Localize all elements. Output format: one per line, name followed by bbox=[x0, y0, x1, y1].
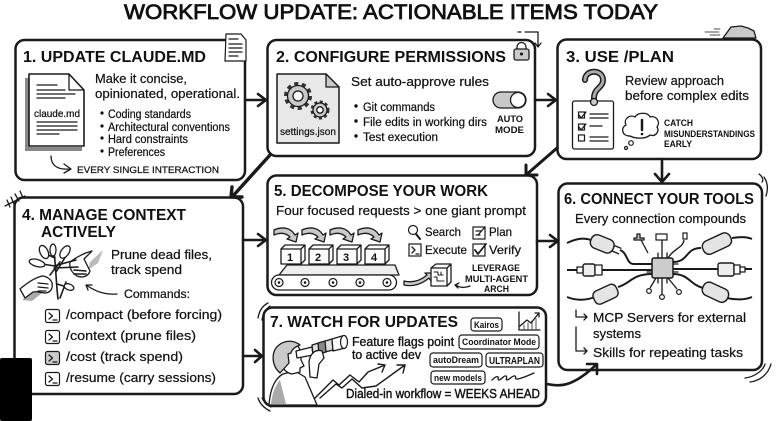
text: concise statement: opinionated, operational. bbox=[95, 86, 240, 101]
tag: ultraplan: ULTRAPLAN bbox=[489, 355, 540, 367]
label: leverage multi-agent arch bbox=[465, 263, 528, 295]
text: review approach: before complex edits bbox=[625, 88, 750, 103]
label: commands with arrow bbox=[86, 285, 190, 301]
label: leverage multi-agent arch: MULTI-AGENT bbox=[465, 274, 528, 285]
panel 7: watch for updates bbox=[258, 303, 546, 411]
icon: conveyor with four boxes: 1 bbox=[287, 252, 293, 264]
icon: lock bbox=[514, 42, 529, 60]
arrow: step 1 to step 2 bbox=[245, 94, 266, 106]
plug: lower right bbox=[700, 280, 731, 304]
tag: new models: new models bbox=[434, 373, 482, 384]
arrows: zigzag trend bbox=[315, 364, 405, 398]
icon: thought cloud bbox=[623, 113, 658, 150]
text: concise statement: Make it concise, bbox=[95, 71, 187, 86]
icon: claude.md document bbox=[25, 74, 84, 151]
heading 2: 2. CONFIGURE PERMISSIONS bbox=[276, 49, 506, 66]
heading 1: 1. UPDATE CLAUDE.MD bbox=[23, 49, 206, 66]
text: feature flags: Feature flags point bbox=[352, 335, 455, 349]
arrow: step 2 to step 4 bbox=[231, 155, 270, 197]
list: auto-approve items bbox=[354, 102, 487, 144]
icon: conveyor with four boxes: 2 bbox=[315, 252, 321, 264]
list: auto-approve items: Git commands bbox=[363, 102, 435, 114]
items: search plan execute verify bbox=[408, 225, 521, 257]
plug: upper left bbox=[588, 233, 622, 257]
plug: lower left bbox=[591, 283, 620, 306]
icon: small gear bbox=[312, 102, 328, 118]
decoration: dashed corner arrow bbox=[518, 32, 541, 47]
decoration: rock on panel bbox=[723, 26, 756, 38]
arrow: step 7 to step 6 bbox=[547, 364, 597, 385]
heading 7: 7. WATCH FOR UPDATES bbox=[270, 314, 458, 331]
text: every connection compounds: Every connection compounds bbox=[575, 211, 746, 226]
text: prune dead files: Prune dead files, bbox=[111, 247, 212, 262]
items: search plan execute verify: Verify bbox=[489, 243, 521, 257]
decoration: squiggle bbox=[492, 373, 534, 380]
command: cost: /cost (track spend) bbox=[66, 349, 183, 364]
panel 3: use /plan bbox=[558, 26, 761, 159]
command: resume: /resume (carry sessions) bbox=[66, 370, 216, 385]
label: commands with arrow: Commands: bbox=[124, 287, 190, 301]
plug: middle right bbox=[718, 263, 745, 276]
command: compact: /compact (before forcing) bbox=[66, 307, 222, 322]
icon: checklist clipboard bbox=[572, 98, 614, 149]
heading 6: 6. CONNECT YOUR TOOLS bbox=[564, 191, 754, 208]
arrow: step 4 to step 7 bbox=[243, 350, 262, 362]
icon: conveyor with four boxes: 4 bbox=[371, 252, 378, 264]
list: tools: MCP Servers for external bbox=[593, 310, 746, 325]
items: search plan execute verify: Execute bbox=[425, 243, 467, 257]
plug: middle left bbox=[577, 264, 602, 276]
panel 6: connect your tools bbox=[558, 174, 771, 382]
callout: catch misunderstandings early bbox=[664, 118, 755, 150]
command: context: /context (prune files) bbox=[66, 328, 196, 343]
icon: conveyor with four boxes: 3 bbox=[343, 252, 349, 264]
callout: catch misunderstandings early: MISUNDERSTANDINGS bbox=[664, 129, 755, 140]
items: search plan execute verify: Plan bbox=[489, 225, 512, 239]
text: review approach bbox=[625, 73, 750, 103]
decoration: hatch marks bbox=[5, 191, 25, 207]
list: tools bbox=[576, 310, 746, 360]
text: four focused requests: Four focused requests > one giant prompt bbox=[276, 203, 526, 218]
black corner block bbox=[0, 358, 32, 421]
decoration: motion lines bbox=[258, 303, 271, 411]
icon: claude.md document: claude.md bbox=[34, 109, 80, 120]
decoration: speed lines bbox=[705, 29, 720, 35]
icon: conveyor with four boxes bbox=[272, 228, 399, 290]
list: tools: Skills for repeating tasks bbox=[593, 345, 744, 360]
list: claude.md contents: Hard constraints bbox=[108, 134, 188, 146]
toggle: auto mode: AUTO bbox=[497, 114, 523, 124]
text: auto-approve rules: Set auto-approve rules bbox=[351, 74, 490, 89]
callout: every single interaction bbox=[51, 156, 219, 176]
panel 1: update claude.md bbox=[16, 34, 246, 180]
tag: autodream: autoDream bbox=[433, 355, 479, 366]
label: leverage multi-agent arch: LEVERAGE bbox=[472, 263, 520, 274]
text: prune dead files: track spend bbox=[111, 262, 182, 277]
heading 4: 4. MANAGE CONTEXT bbox=[22, 207, 186, 224]
icon: question mark bbox=[585, 72, 603, 106]
text: dialed-in workflow: Dialed-in workflow = WEEKS AHEAD bbox=[346, 386, 540, 401]
text: feature flags: to active dev bbox=[352, 348, 422, 362]
icon: multi-agent cube with arrows bbox=[404, 264, 470, 288]
text: review approach: Review approach bbox=[625, 73, 724, 88]
heading 4 bbox=[22, 207, 186, 241]
title: WORKFLOW UPDATE: ACTIONABLE ITEMS TODAY bbox=[124, 1, 658, 24]
heading 5: 5. DECOMPOSE YOUR WORK bbox=[274, 183, 488, 200]
tag: kairos: Kairos bbox=[474, 320, 499, 331]
arrow: step 2 to step 3 bbox=[535, 94, 556, 106]
panel 2: configure permissions bbox=[268, 32, 541, 156]
list: commands bbox=[46, 307, 222, 386]
callout: catch misunderstandings early: EARLY bbox=[664, 139, 693, 150]
list: tools: systems bbox=[593, 326, 642, 341]
arrow: step 3 to step 5 bbox=[526, 148, 557, 175]
text: concise statement bbox=[95, 71, 240, 101]
text: feature flags bbox=[352, 335, 455, 362]
plug: upper right bbox=[700, 231, 733, 256]
icon: small document bbox=[225, 34, 246, 61]
icon: person with telescope bbox=[269, 336, 348, 405]
panel 5: decompose your work bbox=[268, 176, 537, 295]
list: claude.md contents: Architectural conventions bbox=[108, 122, 230, 134]
list: auto-approve items: Test execution bbox=[363, 132, 438, 144]
arrow: step 5 to step 6 bbox=[537, 235, 558, 247]
icon: settings.json file bbox=[277, 74, 339, 143]
tag: coordinator mode: Coordinator Mode bbox=[462, 337, 536, 348]
diagram: chip with cables and plugs bbox=[567, 231, 752, 306]
callout: catch misunderstandings early: CATCH bbox=[664, 118, 693, 129]
panel 4: manage context actively bbox=[5, 191, 243, 394]
arrow: step 4 to step 5 bbox=[243, 234, 266, 246]
icon: hands pruning plant bbox=[20, 244, 103, 301]
icon: large gear bbox=[286, 84, 310, 108]
heading 4: ACTIVELY bbox=[41, 224, 116, 241]
list: auto-approve items: File edits in working dirs bbox=[363, 117, 487, 129]
list: claude.md contents: Preferences bbox=[108, 147, 165, 159]
list: claude.md contents bbox=[100, 109, 230, 159]
text: prune dead files bbox=[111, 247, 212, 277]
icon: settings.json file: settings.json bbox=[280, 126, 336, 138]
label: leverage multi-agent arch: ARCH bbox=[484, 284, 509, 295]
list: claude.md contents: Coding standards bbox=[108, 109, 191, 121]
heading 3: 3. USE /PLAN bbox=[566, 49, 674, 66]
toggle: auto mode bbox=[493, 92, 526, 135]
icon: rising chart bbox=[519, 312, 540, 330]
items: search plan execute verify: Search bbox=[425, 225, 461, 239]
decoration: corner motion lines bbox=[745, 174, 771, 382]
toggle: auto mode: MODE bbox=[495, 125, 524, 135]
callout: every single interaction: EVERY SINGLE INTERACTION bbox=[77, 165, 219, 176]
arrow: step 3 to step 6 bbox=[655, 159, 669, 182]
